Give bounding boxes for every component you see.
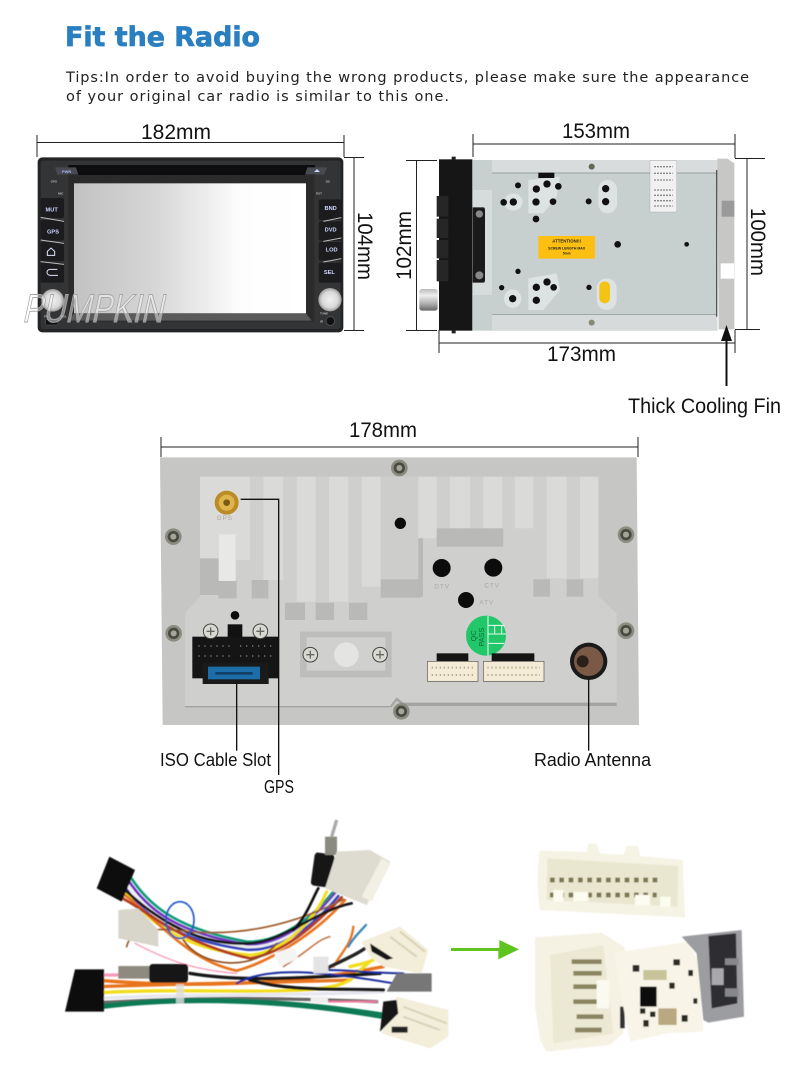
left side buttons: GPS xyxy=(47,229,59,235)
dimension: 153mm width: 153mm xyxy=(562,120,630,143)
small labels: RST xyxy=(316,192,322,196)
small labels: MIC xyxy=(58,192,64,196)
yellow oval xyxy=(599,281,610,303)
label: ISO Cable Slot: ISO Cable Slot xyxy=(160,750,271,770)
small labels: VOL xyxy=(61,314,67,318)
radio antenna socket xyxy=(570,643,607,680)
holes xyxy=(499,164,689,326)
right side buttons xyxy=(319,199,342,283)
dimension: 182mm width: 182mm xyxy=(141,121,211,144)
GPS connector xyxy=(215,491,239,515)
ISO black connector bottom xyxy=(65,969,104,1012)
small labels: TUNE xyxy=(320,311,328,315)
ISO slot xyxy=(192,624,279,684)
title: Fit the Radio xyxy=(65,22,260,53)
knobs xyxy=(41,289,64,312)
white connectors xyxy=(427,653,544,681)
dimension: 104mm height xyxy=(344,157,376,331)
mounting plate xyxy=(300,632,392,677)
faceplate xyxy=(439,159,472,331)
dimension: 102mm height xyxy=(393,160,437,330)
left side buttons xyxy=(41,198,64,283)
watermark: Pumpkin: PUMPKIN xyxy=(20,285,171,331)
callout lines xyxy=(237,499,589,775)
tips text: Tips:In order to avoid buying the wrong products, please make sure the appearance xyxy=(65,70,749,86)
dimension: 153mm width xyxy=(473,120,735,158)
QC pass sticker: PASS xyxy=(477,628,486,647)
top buttons xyxy=(55,167,327,175)
side view of radio xyxy=(419,157,734,333)
rear panel of radio: DTV xyxy=(434,584,450,591)
rear panel of radio xyxy=(160,457,639,775)
rear panel of radio: CTV xyxy=(484,582,500,589)
small labels: GPS xyxy=(51,179,57,183)
ISO black connector top xyxy=(97,857,135,902)
small labels: IR xyxy=(320,319,324,323)
rear panel of radio: GPS xyxy=(217,515,233,522)
arrow: green xyxy=(451,940,519,959)
screen xyxy=(74,183,306,313)
dimension: 100mm height: 100mm xyxy=(746,208,769,276)
dimension: 178mm width: 178mm xyxy=(349,419,417,442)
yellow attention label: SCREW LENGTH MAX xyxy=(548,246,586,250)
upper wire bundle xyxy=(118,873,352,973)
embossed ovals xyxy=(504,177,617,310)
label sticker xyxy=(650,161,677,212)
blue loop wire xyxy=(166,902,194,938)
wiring harness xyxy=(65,820,448,1048)
chassis xyxy=(473,160,717,331)
arrow: cooling fin xyxy=(721,325,732,386)
QC pass sticker xyxy=(466,616,506,656)
right side buttons: BND xyxy=(325,206,337,212)
label: Thick Cooling Fin: Thick Cooling Fin xyxy=(628,395,781,418)
label: Radio Antenna: Radio Antenna xyxy=(534,750,652,770)
knob xyxy=(419,289,438,311)
screws xyxy=(391,460,408,476)
lower wire bundle xyxy=(97,925,403,1018)
dimension: 102mm height: 102mm xyxy=(393,211,416,280)
small labels: PS xyxy=(44,314,48,318)
medium white connector xyxy=(614,942,703,1042)
yellow attention label xyxy=(538,236,595,259)
large white connector xyxy=(535,933,625,1052)
heat sink fins xyxy=(200,477,598,602)
tips text: of your original car radio is similar to this one. xyxy=(66,89,449,105)
connector close-ups xyxy=(535,843,744,1052)
right side buttons: LOD xyxy=(326,248,338,254)
dimension: 173mm width xyxy=(439,330,735,366)
holes xyxy=(231,518,502,620)
top buttons: PWR xyxy=(62,169,71,174)
dimension: 100mm height xyxy=(735,158,769,330)
rear panel of radio: ATV xyxy=(479,600,494,607)
tips text xyxy=(65,70,749,105)
dimension: 178mm width xyxy=(161,419,638,457)
cooling fin xyxy=(717,159,734,329)
right side buttons: DVD xyxy=(325,227,337,233)
label: GPS: GPS xyxy=(264,777,294,797)
dimension: 104mm height: 104mm xyxy=(353,212,376,280)
white connectors xyxy=(325,850,390,905)
24 pin connector xyxy=(537,843,685,917)
front view of radio xyxy=(38,157,343,332)
small labels xyxy=(44,179,331,323)
right side buttons: SEL xyxy=(324,270,335,276)
small labels: SD xyxy=(326,179,331,183)
recessed area xyxy=(185,477,617,706)
yellow attention label: ATTENTION!!! xyxy=(552,239,582,244)
QC pass sticker: QC xyxy=(469,630,478,641)
dimension: 182mm width xyxy=(37,121,344,157)
tags xyxy=(274,947,298,967)
grey connector xyxy=(682,930,744,1023)
left side buttons: MUT xyxy=(46,207,58,213)
dimension: 173mm width: 173mm xyxy=(547,343,616,366)
yellow attention label: 5mm xyxy=(563,252,571,256)
antenna plugs xyxy=(118,820,337,983)
